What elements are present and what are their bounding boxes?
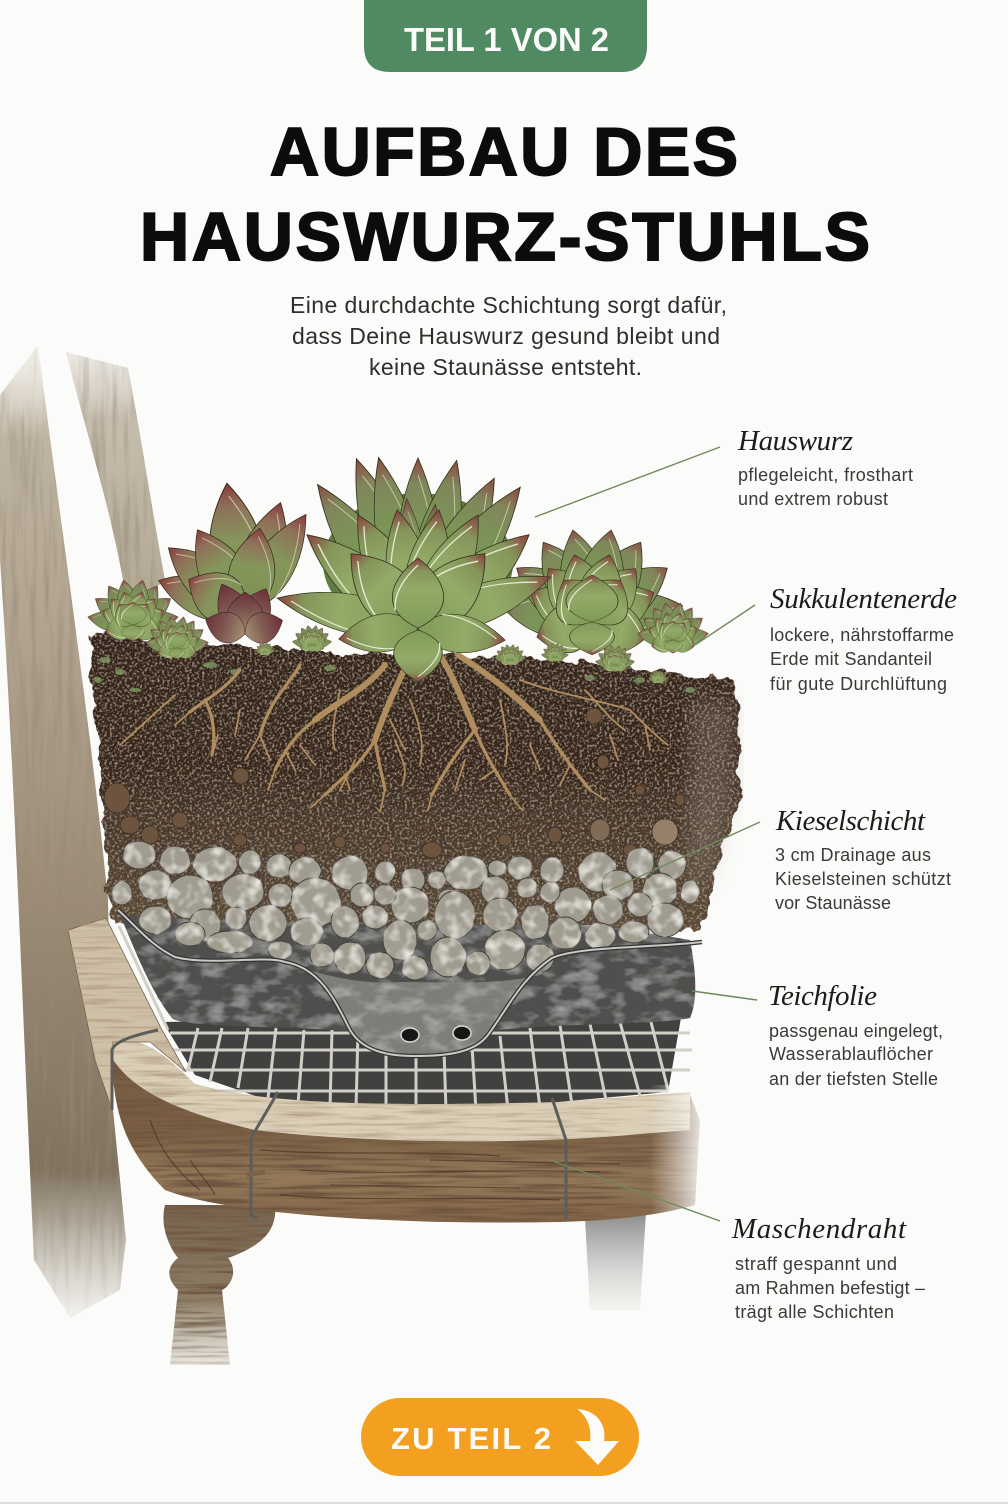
green moss specks on soil surface [94, 657, 695, 693]
chair seat frame [68, 918, 710, 1230]
button: Zu Teil 2: ZU TEIL 2 [391, 1421, 551, 1456]
title: HAUSWURZ-STUHLS [140, 199, 870, 275]
small rosette [144, 615, 210, 661]
far right rosette [636, 601, 710, 656]
label: Hauswurz: und extrem robust [738, 489, 888, 509]
right rosette [498, 525, 686, 660]
main houseleek rosette [273, 451, 558, 682]
label: Hauswurz: Hauswurz [737, 425, 853, 457]
turned front leg [163, 1205, 275, 1365]
illustration: chair with planted layers [0, 345, 760, 1365]
soil pebbles [104, 708, 685, 858]
soil layer [88, 632, 742, 930]
label: Maschendraht: am Rahmen befestigt – [735, 1278, 925, 1298]
subtitle: keine Staunässe entsteht. [369, 354, 642, 380]
title [140, 114, 870, 275]
right front leg [585, 1212, 646, 1310]
label: Kieselschicht: 3 cm Drainage aus [775, 845, 931, 865]
label: Sukkulentenerde: Erde mit Sandanteil [770, 649, 932, 669]
label: Sukkulentenerde: Sukkulentenerde [770, 583, 957, 615]
label: Hauswurz: pflegeleicht, frosthart [738, 465, 913, 485]
label: Kieselschicht [775, 805, 951, 913]
label: Kieselschicht: Kieselschicht [775, 805, 926, 837]
label: Hauswurz [737, 425, 913, 509]
drainage holes [401, 1026, 471, 1042]
reddish rosette [152, 480, 323, 648]
badge: Teil 1 von 2 [364, 0, 647, 72]
icon: curved arrow [575, 1409, 619, 1465]
root systems [120, 655, 668, 812]
label: Maschendraht: trägt alle Schichten [735, 1302, 894, 1322]
label: Sukkulentenerde [770, 583, 957, 694]
leader lines [535, 447, 760, 1221]
label: Kieselschicht: Kieselsteinen schützt [775, 869, 951, 889]
label: Kieselschicht: vor Staunässe [775, 893, 891, 913]
tiny offsets [255, 624, 668, 684]
subtitle: dass Deine Hauswurz gesund bleibt und [292, 323, 720, 349]
wire fasteners [112, 1030, 566, 1220]
label: Teichfolie: Teichfolie [768, 980, 877, 1012]
wire mesh [119, 926, 692, 1112]
seat grain [150, 1120, 620, 1200]
label: Maschendraht: Maschendraht [731, 1213, 907, 1245]
pond liner: front sheet [118, 910, 702, 1056]
label: Teichfolie: Wasserablauflöcher [769, 1044, 933, 1064]
label: Maschendraht [731, 1213, 925, 1322]
label: Teichfolie [768, 980, 943, 1089]
label: Sukkulentenerde: für gute Durchlüftung [770, 674, 947, 694]
small left rosette [86, 578, 180, 644]
label: Maschendraht: straff gespannt und [735, 1254, 897, 1274]
label: Sukkulentenerde: lockere, nährstoffarme [770, 625, 954, 645]
title: AUFBAU DES [270, 114, 738, 190]
label: Teichfolie: an der tiefsten Stelle [769, 1069, 938, 1089]
button: Zu Teil 2 [361, 1398, 639, 1476]
subtitle: Eine durchdachte Schichtung sorgt dafür, [290, 292, 727, 318]
pond liner: back sheet [120, 915, 695, 1032]
subtitle [290, 292, 727, 380]
gravel layer [112, 841, 699, 980]
chair back post and rear leg [0, 345, 126, 1318]
label: Teichfolie: passgenau eingelegt, [769, 1021, 943, 1041]
chair back slat [66, 352, 165, 610]
badge: Teil 1 von 2: TEIL 1 VON 2 [404, 21, 609, 58]
